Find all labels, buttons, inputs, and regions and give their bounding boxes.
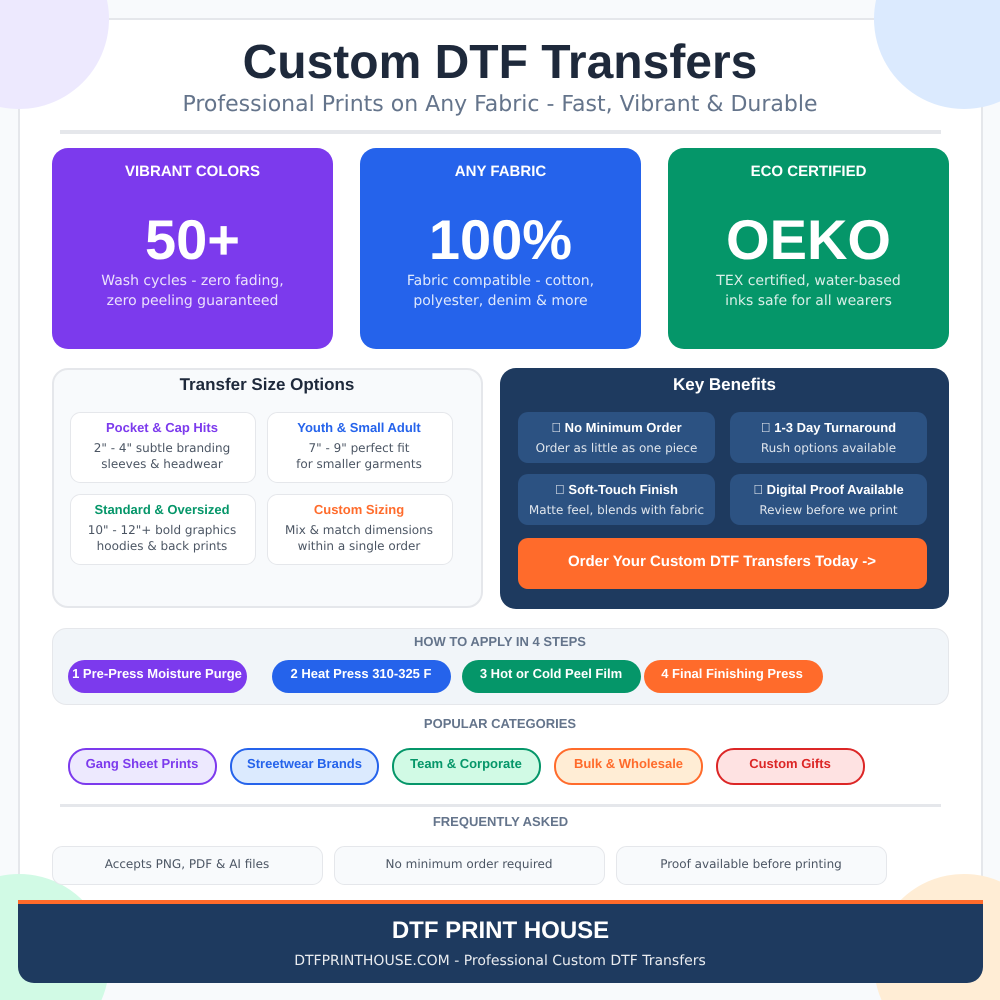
step 4 — [644, 660, 823, 693]
panel: eco certified: ECO CERTIFIED — [751, 163, 867, 180]
footer brand: DTF PRINT HOUSE — [392, 917, 609, 944]
step 1 — [68, 660, 247, 693]
step 1: 1 Pre-Press Moisture Purge — [72, 666, 242, 681]
step 2: 2 Heat Press 310-325 F — [291, 666, 432, 681]
size card: pocket and cap hits: sleeves & headwear — [101, 457, 223, 471]
faq: accepted files — [52, 846, 322, 884]
size card: custom sizing: within a single order — [298, 539, 420, 553]
subtitle: Professional Prints on Any Fabric - Fast, Vibrant & Durable — [182, 92, 818, 117]
size card: standard and oversized: 10" - 12"+ bold graphics — [88, 523, 236, 537]
tag: gang sheet prints — [69, 749, 216, 784]
panel: eco certified — [668, 148, 949, 349]
footer url: DTFPRINTHOUSE.COM - Professional Custom DTF Transfers — [294, 953, 706, 969]
faq: proof — [616, 846, 886, 884]
heading: popular categories: POPULAR CATEGORIES — [424, 716, 576, 731]
call to action button — [518, 538, 927, 589]
heading: how to apply: HOW TO APPLY IN 4 STEPS — [414, 634, 586, 649]
size card: youth and small adult: Youth & Small Adult — [297, 420, 421, 435]
heading: transfer size options: Transfer Size Options — [180, 375, 354, 394]
panel: vibrant colors: VIBRANT COLORS — [125, 163, 260, 180]
tag: streetwear brands — [231, 749, 378, 784]
tag: bulk and wholesale: Bulk & Wholesale — [574, 756, 683, 771]
size card: youth and small adult: 7" - 9" perfect fit — [308, 441, 410, 455]
step 3 — [462, 660, 641, 693]
panel: any fabric: Fabric compatible - cotton, — [407, 273, 594, 289]
decorative circle: top right — [874, 0, 1000, 109]
size card: custom sizing: Mix & match dimensions — [285, 523, 433, 537]
size card: custom sizing: Custom Sizing — [314, 502, 404, 517]
benefit: digital proof: Review before we print — [759, 503, 898, 517]
benefit: soft-touch finish — [518, 474, 715, 525]
tag: team and corporate: Team & Corporate — [410, 756, 522, 771]
step 2 — [272, 660, 451, 693]
size card: pocket and cap hits: Pocket & Cap Hits — [106, 420, 218, 435]
benefit: no minimum order — [518, 412, 715, 463]
tag: bulk and wholesale — [555, 749, 702, 784]
panel: any fabric — [360, 148, 641, 349]
size card: youth and small adult: for smaller garments — [296, 457, 422, 471]
benefit: soft-touch finish: 􏿽 Soft-Touch Finish — [555, 482, 678, 497]
panel: any fabric: ANY FABRIC — [455, 163, 546, 180]
tag: streetwear brands: Streetwear Brands — [247, 756, 362, 771]
heading: key benefits: Key Benefits — [673, 375, 776, 394]
panel: vibrant colors: zero peeling guaranteed — [107, 293, 278, 309]
heading: frequently asked: FREQUENTLY ASKED — [433, 814, 568, 829]
panel: vibrant colors: Wash cycles - zero fading, — [101, 273, 284, 289]
size card: standard and oversized: Standard & Oversized — [94, 502, 230, 517]
size card: standard and oversized: hoodies & back prints — [97, 539, 227, 553]
benefit: no minimum order: Order as little as one piece — [536, 441, 697, 455]
decorative circle: bottom right — [874, 874, 1000, 1000]
tag: team and corporate — [393, 749, 540, 784]
call to action button: Order Your Custom DTF Transfers Today -> — [568, 553, 876, 570]
size card: standard and oversized — [70, 494, 256, 564]
panel: any fabric: 100% — [429, 208, 572, 271]
decorative circle: bottom left — [0, 874, 109, 1000]
panel: how to apply — [52, 628, 948, 704]
footer — [18, 900, 983, 983]
size card: custom sizing — [268, 494, 452, 564]
decorative circle: top left — [0, 0, 109, 109]
category tags — [69, 749, 864, 784]
size card: pocket and cap hits — [70, 412, 256, 482]
tag: custom gifts — [717, 749, 864, 784]
benefit: digital proof — [730, 474, 927, 525]
step 3: 3 Hot or Cold Peel Film — [480, 666, 622, 681]
benefit: turnaround: 􏿽 1-3 Day Turnaround — [761, 420, 896, 435]
tag: gang sheet prints: Gang Sheet Prints — [86, 756, 198, 771]
panel: eco certified: inks safe for all wearers — [725, 293, 892, 309]
benefit: turnaround: Rush options available — [761, 441, 896, 455]
faq: accepted files: Accepts PNG, PDF & AI files — [105, 857, 269, 871]
step 4: 4 Final Finishing Press — [661, 666, 803, 681]
benefit: digital proof: 􏿽 Digital Proof Available — [753, 482, 904, 497]
panel: any fabric: polyester, denim & more — [413, 293, 588, 309]
faq: no minimum — [334, 846, 604, 884]
panel: transfer size options — [53, 369, 482, 607]
benefit: turnaround — [730, 412, 927, 463]
faq: proof: Proof available before printing — [660, 857, 842, 871]
size card: pocket and cap hits: 2" - 4" subtle branding — [94, 441, 230, 455]
tag: custom gifts: Custom Gifts — [749, 756, 831, 771]
panel: vibrant colors — [52, 148, 333, 349]
size card: youth and small adult — [268, 412, 452, 482]
title: Custom DTF Transfers — [243, 36, 757, 89]
panel: key benefits — [500, 368, 949, 609]
benefit: soft-touch finish: Matte feel, blends with fabric — [529, 503, 704, 517]
benefit: no minimum order: 􏿽 No Minimum Order — [551, 420, 682, 435]
panel: eco certified: OEKO — [726, 208, 891, 271]
panel: eco certified: TEX certified, water-based — [715, 273, 901, 289]
faq: no minimum: No minimum order required — [386, 857, 552, 871]
panel: vibrant colors: 50+ — [145, 208, 240, 271]
